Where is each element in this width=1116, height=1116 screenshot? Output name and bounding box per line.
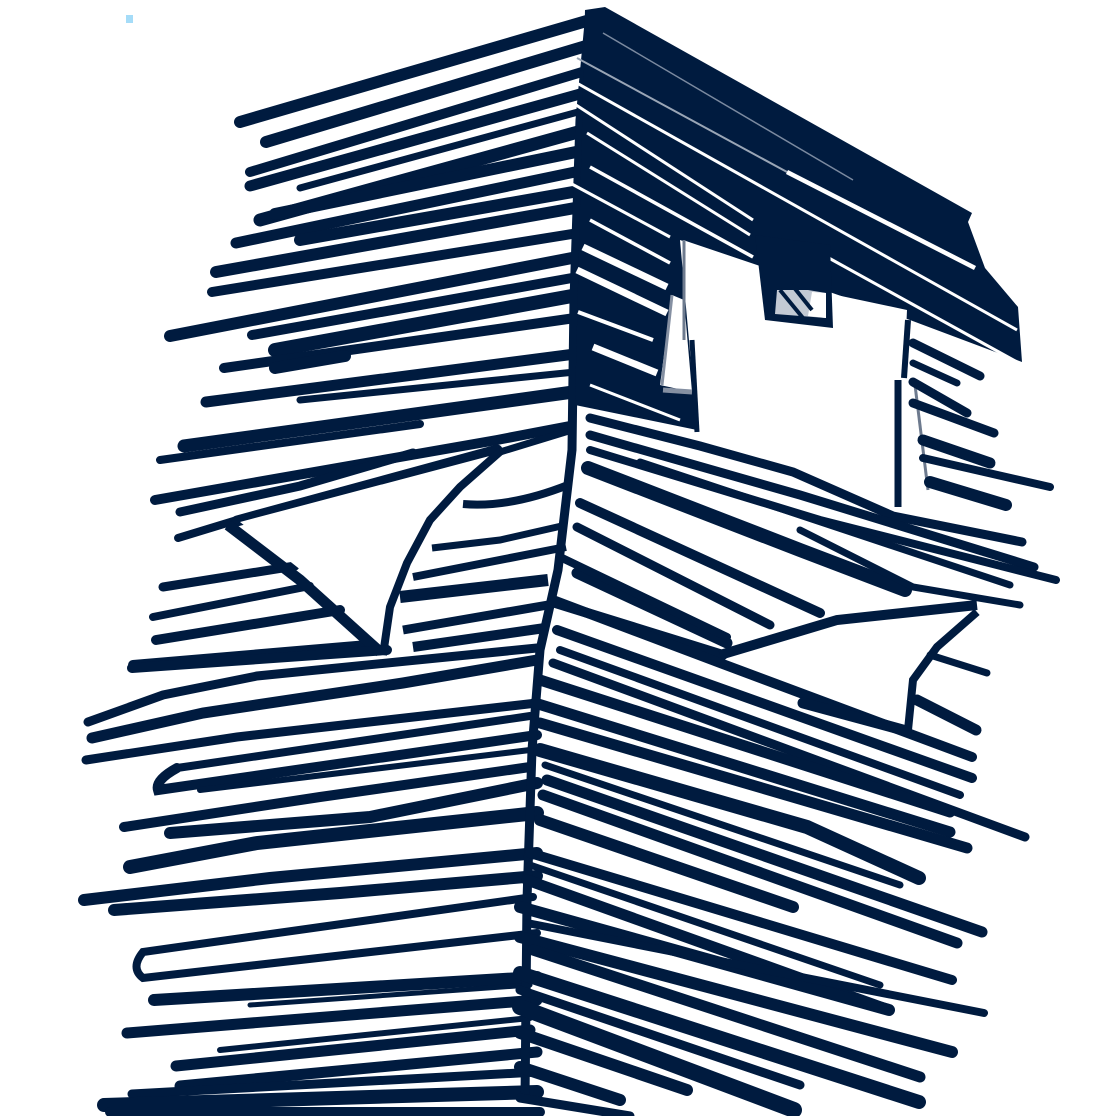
folded page corner, right: [720, 605, 977, 730]
right face: middle paper edges: [552, 418, 1056, 655]
right face: upper block with white gaps: [570, 7, 1022, 430]
right face: lower paper edges: [520, 600, 1025, 1116]
hanging page: [660, 235, 928, 507]
left face: lines left of folded corner: [133, 566, 368, 665]
spine: corner of stack: [525, 12, 590, 1100]
speck: light blue dot: [126, 15, 133, 23]
folded page corner, left: [228, 450, 502, 655]
left face: upper paper edges: [155, 20, 590, 538]
icon: paper clip: [755, 235, 833, 328]
left face: lower paper edges: [84, 648, 540, 1112]
right face: lines right of page: [913, 343, 1050, 505]
left face: lines right of folded corner: [400, 430, 572, 647]
